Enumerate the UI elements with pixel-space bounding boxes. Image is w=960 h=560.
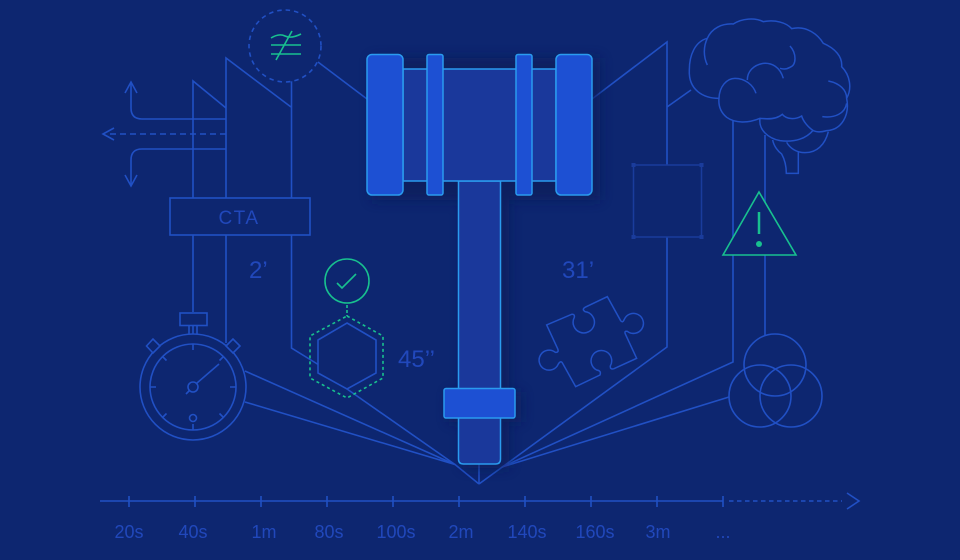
timeline labels: 1m	[251, 522, 277, 542]
icon: brain	[689, 19, 850, 173]
gavel left band	[427, 54, 443, 195]
icon: warning triangle	[723, 192, 796, 255]
icon: jigsaw puzzle piece	[539, 297, 643, 387]
icon: check circle	[325, 259, 369, 316]
icon: venn diagram circles	[729, 334, 822, 427]
gavel right cap	[556, 54, 592, 195]
icon: square with corner handles	[632, 163, 704, 239]
gavel shadow	[372, 58, 600, 468]
gavel handle	[458, 181, 500, 464]
CTA button: CTA	[218, 208, 260, 229]
timeline axis	[100, 493, 859, 509]
gavel	[367, 54, 592, 464]
timeline labels: 160s	[575, 522, 615, 542]
converging lines to gavel tip	[245, 371, 729, 484]
timeline labels: 100s	[376, 522, 416, 542]
timeline labels: 140s	[507, 522, 547, 542]
left building outline lines	[193, 58, 367, 365]
timeline labels: 2m	[448, 522, 474, 542]
gavel left cap	[367, 54, 403, 195]
timeline labels: 40s	[178, 522, 208, 542]
icon: hexagon	[310, 316, 383, 398]
gavel head body	[403, 69, 556, 181]
timeline labels: ...	[715, 522, 731, 542]
icon: not-equal dashed circle	[249, 10, 321, 82]
timeline labels	[114, 522, 731, 542]
gavel collar	[444, 388, 515, 418]
CTA button	[170, 198, 310, 235]
duration label 31': 31’	[562, 257, 594, 284]
timeline labels: 3m	[645, 522, 671, 542]
icon: branching arrows	[103, 82, 226, 186]
duration label 45'': 45’’	[398, 346, 435, 373]
timeline labels: 20s	[114, 522, 144, 542]
timeline labels: 80s	[314, 522, 344, 542]
duration label 2': 2’	[249, 257, 268, 284]
right building outline lines	[479, 42, 765, 484]
gavel right band	[516, 54, 532, 195]
icon: stopwatch	[140, 313, 246, 440]
